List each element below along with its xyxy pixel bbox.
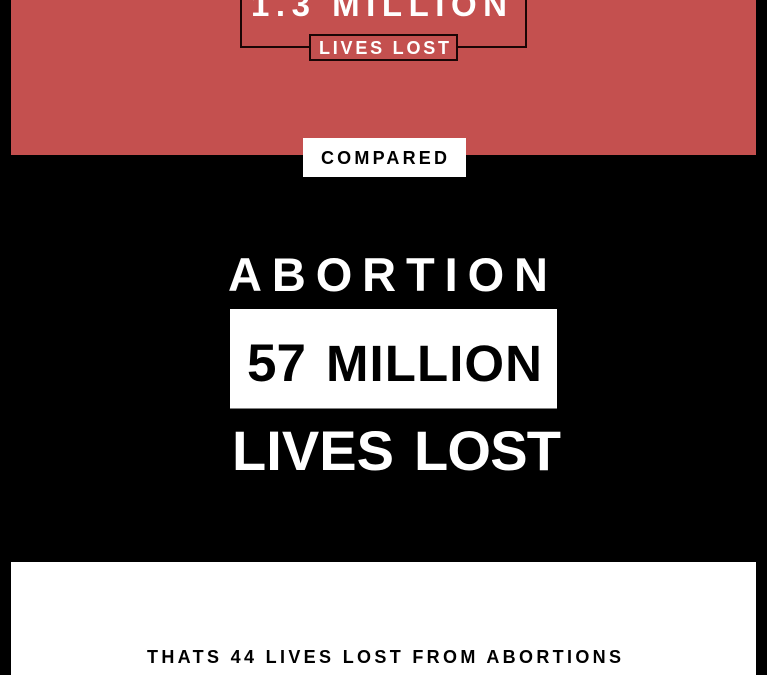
label: compared [303,138,466,177]
stat: 57 million: 57 [247,334,306,393]
label: lives lost large [232,419,561,482]
text: thats 44 lives lost from abortions: THATS 44 LIVES LOST FROM ABORTIONS [147,647,621,667]
panel: red top section [11,0,756,155]
label: lives lost large: LIVES [232,419,394,482]
label: lives lost box: LIVES LOST [319,38,449,58]
stat: 57 million [230,309,557,408]
frame around 1.3 million [241,0,526,47]
stat: 57 million: MILLION [326,335,542,392]
label: compared: COMPARED [321,148,447,168]
label: lives lost large: LOST [414,419,561,482]
heading: abortion: ABORTION [228,248,548,301]
panel: white bottom section [11,562,756,675]
